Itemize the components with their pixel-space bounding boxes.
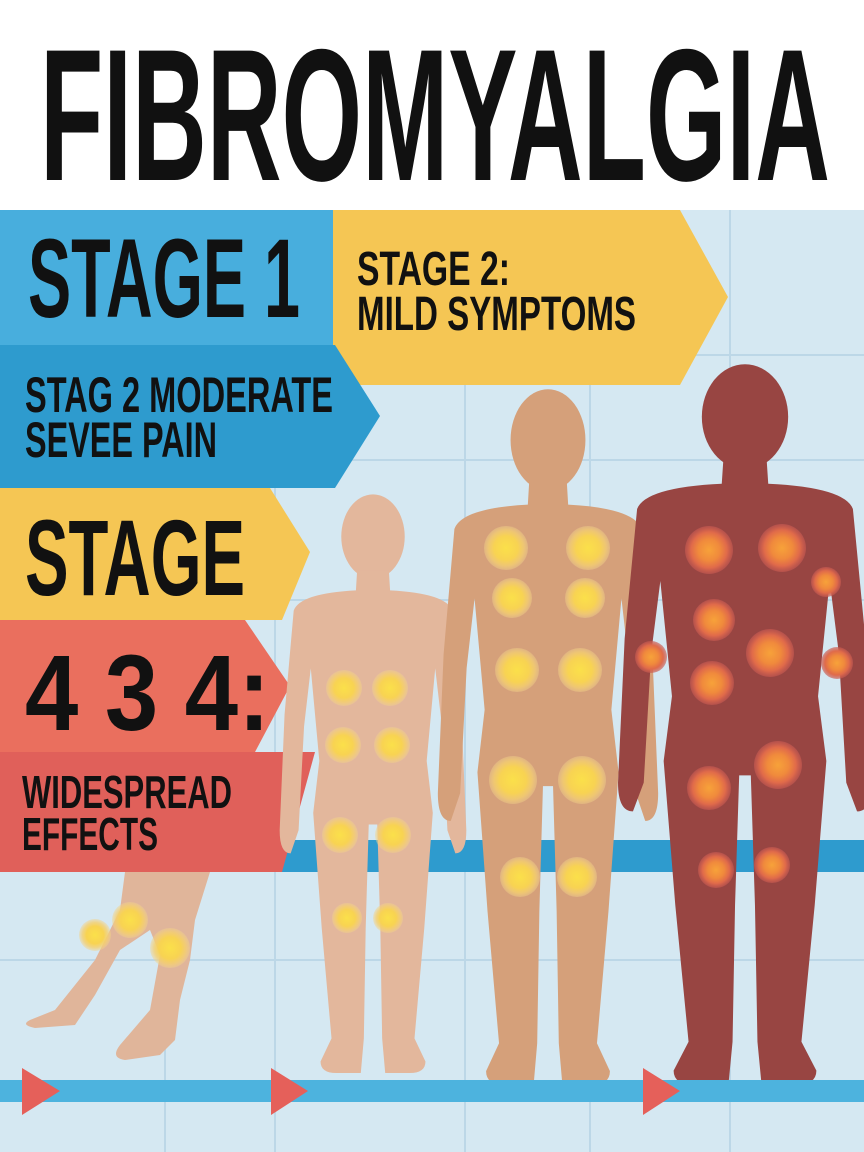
timeline <box>0 1068 864 1115</box>
banner: 4 3 4: 4 3 4: <box>25 632 270 753</box>
figure: partial legs <box>26 872 210 1060</box>
banner: stage 2 mild symptoms: STAGE 2: <box>357 243 510 296</box>
banner: stage 2 mild symptoms: MILD SYMPTOMS <box>357 288 636 341</box>
figure: stage 3 body <box>618 364 864 1085</box>
banner: widespread effects: WIDESPREAD <box>22 766 232 818</box>
banner: stag 2 moderate: SEVEE PAIN <box>25 412 217 468</box>
band: horizontal blue bar <box>270 840 864 872</box>
banner: stag 2 moderate: STAG 2 MODERATE <box>25 367 333 423</box>
banner: widespread effects: EFFECTS <box>22 808 158 860</box>
banner: stage 2 mild symptoms <box>333 210 728 385</box>
banner: stag 2 moderate <box>0 345 380 488</box>
banner: stage 1: STAGE 1 <box>28 216 300 341</box>
banner: stage: STAGE <box>25 497 245 618</box>
banner: widespread effects <box>0 752 315 872</box>
figure: stage 2 body <box>438 389 658 1085</box>
banner: stage <box>0 488 310 620</box>
banner: stage 1 <box>0 210 333 346</box>
figure: stage 1 body <box>280 494 466 1073</box>
